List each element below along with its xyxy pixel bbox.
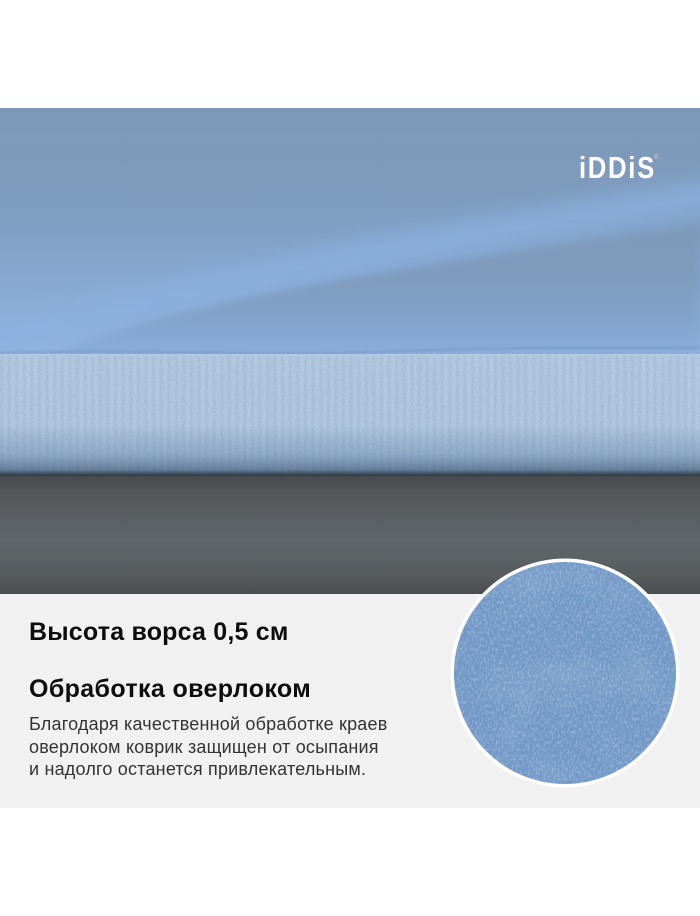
heading: overlock finishing: Обработка оверлоком — [29, 675, 311, 703]
text block: description: оверлоком коврик защищен от осыпания — [29, 737, 379, 757]
text block: description — [29, 714, 388, 779]
circle: pile texture close-up — [450, 558, 680, 788]
logo: iddis: iDDiS® — [579, 150, 659, 185]
panel: light text background — [0, 594, 700, 808]
text block: description: и надолго останется привлекательным. — [29, 759, 366, 779]
text block: description: Благодаря качественной обработке краев — [29, 714, 388, 734]
photo: blue bath mat edge on grey floor — [0, 108, 700, 594]
heading: pile height: Высота ворса 0,5 см — [29, 618, 289, 646]
